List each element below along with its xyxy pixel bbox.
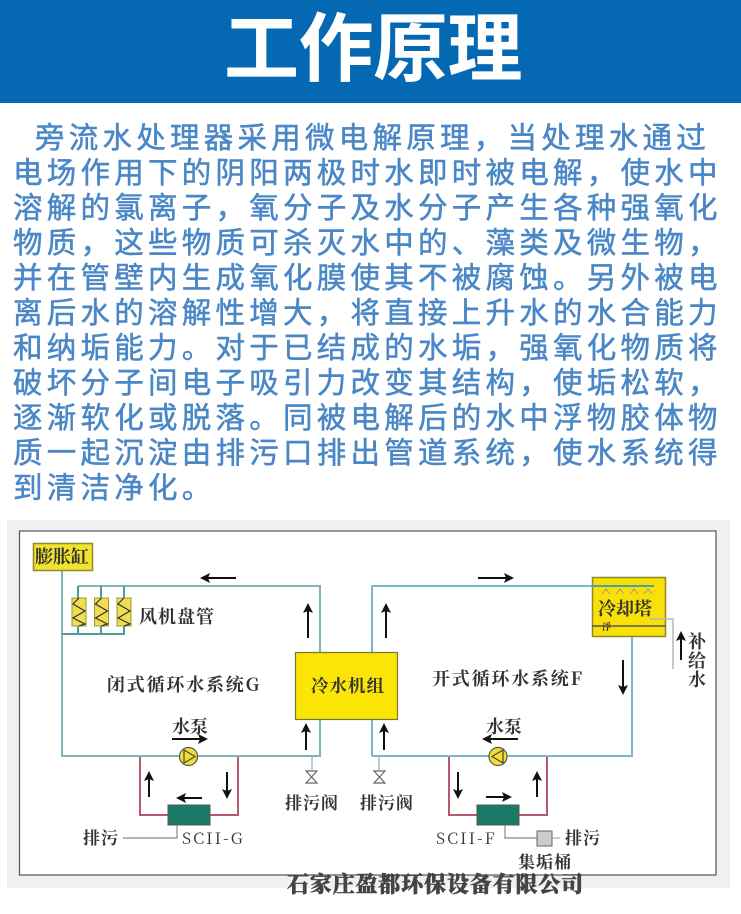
makeup water: 水 bbox=[688, 666, 706, 692]
body text block: 离后水的溶解性增大，将直接上升水的水合能力 bbox=[13, 297, 722, 330]
body text block bbox=[13, 122, 722, 505]
diagram panel bbox=[7, 520, 730, 888]
side stream pipes bbox=[140, 757, 547, 815]
body text block: 质一起沉淀由排污口排出管道系统，使水系统得 bbox=[13, 437, 722, 470]
pump labels bbox=[172, 713, 522, 739]
body text block: 到清洁净化。 bbox=[13, 472, 216, 505]
treater SCII-F: SCII-F bbox=[436, 826, 497, 849]
body text block: 破坏分子间电子吸引力改变其结构，使垢松软， bbox=[13, 367, 722, 400]
company name: 石家庄盈都环保设备有限公司 bbox=[287, 868, 584, 899]
chiller unit bbox=[296, 652, 398, 720]
closed loop pipes bbox=[62, 571, 320, 756]
body text block: 旁流水处理器采用微电解原理，当处理水通过 bbox=[35, 122, 710, 155]
flow arrows bbox=[149, 578, 623, 798]
right drain valve bbox=[360, 757, 414, 814]
cooling tower: 冷却塔 bbox=[598, 595, 652, 621]
makeup water: 补 bbox=[688, 628, 707, 654]
body text block: 并在管壁内生成氧化膜使其不被腐蚀。另外被电 bbox=[13, 262, 722, 295]
label: closed system: 闭式循环水系统G bbox=[107, 671, 261, 697]
right pump bbox=[489, 748, 507, 766]
label: open system: 开式循环水系统F bbox=[432, 665, 584, 691]
body text block: 物质，这些物质可杀灭水中的、藻类及微生物， bbox=[13, 227, 722, 260]
pump labels: 水泵 bbox=[172, 713, 208, 739]
chiller unit: 冷水机组 bbox=[311, 673, 385, 698]
makeup water bbox=[650, 619, 707, 692]
pump labels: 水泵 bbox=[486, 713, 522, 739]
title banner bbox=[0, 0, 741, 103]
fan coils bbox=[72, 598, 215, 629]
body text block: 溶解的氯离子，氧分子及水分子产生各种强氧化 bbox=[13, 192, 722, 225]
expansion tank: 膨胀缸 bbox=[35, 543, 89, 569]
dirt collection bucket bbox=[518, 824, 601, 873]
right drain valve: 排污阀 bbox=[360, 789, 414, 814]
title: 工作原理 bbox=[224, 7, 522, 91]
fan coils: 风机盘管 bbox=[139, 603, 215, 629]
body text block: 逐渐软化或脱落。同被电解后的水中浮物胶体物 bbox=[13, 402, 722, 435]
body text block: 电场作用下的阴阳两极时水即时被电解，使水中 bbox=[13, 157, 722, 190]
treater SCII-F bbox=[436, 805, 537, 849]
dirt collection bucket: 排污 bbox=[565, 824, 601, 849]
body text block: 和纳垢能力。对于已结成的水垢，强氧化物质将 bbox=[13, 332, 722, 365]
treater SCII-G: 排污 bbox=[83, 824, 119, 849]
left drain valve bbox=[285, 757, 339, 814]
dirt collection bucket: 集垢桶 bbox=[518, 848, 572, 873]
makeup water: 给 bbox=[688, 647, 706, 673]
treater SCII-G bbox=[83, 805, 245, 849]
cooling tower bbox=[592, 578, 666, 636]
treater SCII-G: SCII-G bbox=[182, 826, 245, 849]
left drain valve: 排污阀 bbox=[285, 789, 339, 814]
left pump bbox=[180, 748, 198, 766]
cooling tower: 浮 bbox=[602, 620, 611, 633]
open loop pipes bbox=[372, 586, 652, 756]
